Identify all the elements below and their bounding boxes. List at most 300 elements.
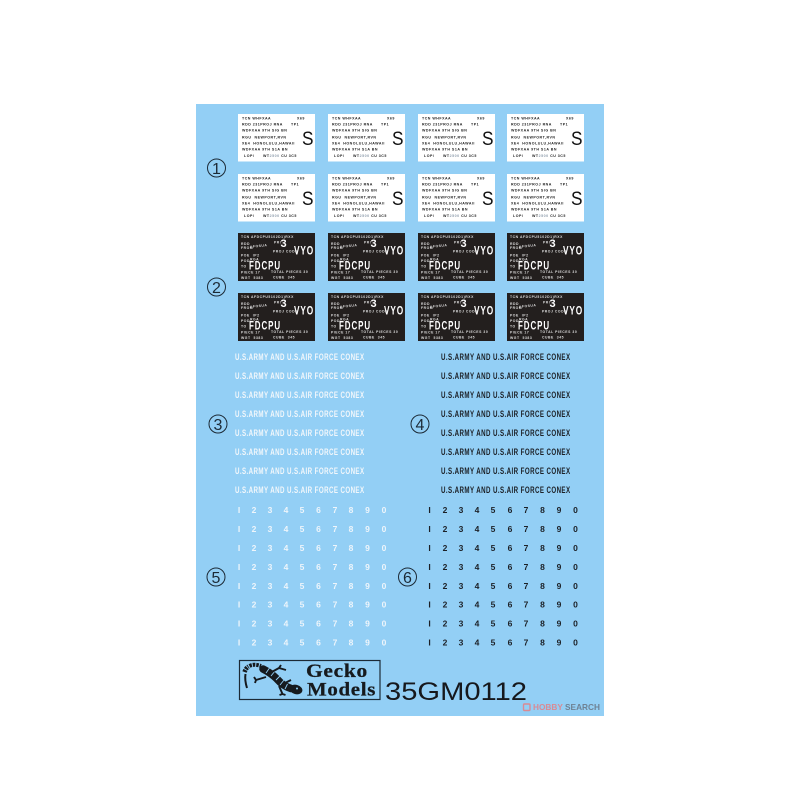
black plate row 1 column 1: TOTAL PIECES 30 — [271, 270, 308, 274]
section 5: white number rows: 0 — [382, 505, 387, 515]
black plate row 1 column 4: CUBE 345 — [542, 276, 564, 280]
section 5: white number rows: 0 — [382, 581, 387, 591]
black plate row 2 column 1: PIECE 17 — [241, 330, 260, 334]
section 3: white CONEX stencil lines: U.S.ARMY AND U.S.AIR FORCE CONEX — [235, 447, 364, 457]
white plate row 1 column 3: S — [482, 128, 494, 150]
black plate row 2 column 3: PRI — [454, 300, 461, 304]
section 5: white number rows: 9 — [365, 600, 370, 610]
section 5: white number rows: 9 — [365, 505, 370, 515]
section 6: black number rows: I — [428, 618, 431, 628]
section 5: white number rows: 6 — [316, 562, 321, 572]
black plate row 2 column 3: 3 — [460, 298, 467, 310]
section 6: black number rows: I — [428, 600, 431, 610]
panel: blue decal sheet — [196, 104, 604, 716]
section 5: white number rows: 4 — [284, 505, 289, 515]
black plate row 1 column 4: VYO — [563, 244, 583, 258]
black plate row 2 column 3: FDCPU — [429, 318, 461, 332]
white plate row 2 column 2: S — [392, 188, 404, 210]
black plate row 1 column 3: PROJ CODE — [453, 250, 478, 254]
black plate row 1 column 4: POD — [510, 259, 519, 263]
white plate row 2 column 1: S — [302, 188, 314, 210]
white plate row 2 column 4: WT2500 CU 3C5 — [532, 214, 566, 218]
section 6: black number rows: 3 — [459, 600, 464, 610]
section 6: black number rows: 9 — [557, 638, 562, 648]
black plate row 1 column 4: PROJ CODE — [542, 250, 567, 254]
black plate row 2 column 1: FDCPU — [249, 318, 281, 332]
black plate row 1 column 3: TOTAL PIECES 30 — [451, 270, 488, 274]
section 6: black number rows: 6 — [508, 562, 513, 572]
section 6: black number rows: 8 — [540, 505, 545, 515]
section 6: black number rows: 0 — [573, 618, 578, 628]
section 6: black number rows: 2 — [443, 543, 448, 553]
black plate row 1 column 1: RGA — [250, 258, 259, 262]
section 6: black number rows: 9 — [557, 618, 562, 628]
section 6: black number rows: 4 — [475, 524, 480, 534]
white plate row 2 column 2: TCN WHFXAA — [332, 176, 361, 180]
white plate row 2 column 1: WDFXAA 9TH S1A BN — [242, 208, 288, 212]
black plate row 2 column 3: AFOSUA — [430, 303, 448, 309]
section 5: white number rows: 0 — [382, 524, 387, 534]
black plate row 2 column 4: TCN AFDCPU5102D1)RXX — [510, 295, 563, 299]
white plate row 2 column 2: LOP/ — [334, 214, 344, 218]
white plate row 2 column 3: XE4 HONOLULU,HAWAII — [422, 201, 475, 205]
white plate row 1 column 2: S — [392, 128, 404, 150]
product code: 35GM0112 — [385, 678, 527, 706]
black plate row 2 column 1: AFOSUA — [250, 303, 268, 309]
black plate row 2 column 2: AFOSUA — [340, 303, 358, 309]
section 6: black number rows: 9 — [557, 581, 562, 591]
section 6: black number rows: 8 — [540, 638, 545, 648]
black plate row 1 column 4: 3 — [550, 238, 556, 250]
white plate row 2 column 1: LOP/ — [244, 214, 254, 218]
section 5: white number rows: I — [238, 543, 240, 553]
white plate row 2 column 1: WT2500 CU 3C5 — [263, 214, 297, 218]
black plate row 1 column 1: 3 — [280, 238, 287, 250]
section 6: black number rows: 4 — [475, 638, 480, 648]
section 5: white number rows: 9 — [365, 562, 370, 572]
black plate row 1 column 2: RGA — [340, 258, 349, 262]
section 6: black number rows: 2 — [443, 524, 448, 534]
section 5: white number rows: 8 — [349, 524, 354, 534]
section 5: white number rows: I — [238, 600, 240, 610]
black plate row 2 column 3: RGA — [430, 318, 439, 322]
section 6: black number rows: 4 — [475, 581, 480, 591]
black plate row 1 column 2: POD — [331, 259, 340, 263]
black plate row 2 column 1: TO — [241, 324, 247, 328]
white plate row 1 column 4 — [507, 114, 584, 162]
section 5: white number rows: I — [238, 562, 240, 572]
section 5: white number rows: 5 — [300, 600, 305, 610]
section 6: black number rows: 4 — [475, 600, 480, 610]
section 4: black CONEX stencil lines: U.S.ARMY AND U.S.AIR FORCE CONEX — [441, 390, 570, 400]
white plate row 2 column 3: WDFXAA 9TH S1A BN — [422, 208, 468, 212]
white plate row 1 column 4: TCN WHFXAA — [511, 116, 540, 120]
black plate row 1 column 4: FROM — [510, 246, 522, 250]
white plate row 1 column 2: X69 — [387, 116, 395, 120]
black plate row 1 column 1: TO — [241, 264, 247, 268]
Gecko Models logo — [240, 660, 380, 700]
section 5: white number rows: 2 — [252, 524, 257, 534]
black plate row 2 column 1: TOTAL PIECES 30 — [271, 330, 308, 334]
black plate row 1 column 1: RDD — [241, 242, 250, 246]
black plate row 1 column 2: FROM — [331, 246, 343, 250]
section 5: white number rows: 3 — [268, 524, 273, 534]
section 6: black number rows: 9 — [557, 562, 562, 572]
section 5: white number rows: 7 — [333, 524, 338, 534]
section 5: white number rows: 3 — [268, 543, 273, 553]
black plate row 1 column 1: PRI — [274, 240, 281, 244]
section 1 number marker — [208, 159, 226, 178]
section 4: black CONEX stencil lines: U.S.ARMY AND U.S.AIR FORCE CONEX — [441, 466, 570, 476]
white plate row 2 column 4: TCN WHFXAA — [511, 176, 540, 180]
section 5: white number rows: 9 — [365, 524, 370, 534]
black plate row 1 column 2: CUBE 345 — [363, 276, 385, 280]
section 6 number marker — [398, 568, 416, 587]
white plate row 2 column 4: XE4 HONOLULU,HAWAII — [511, 201, 564, 205]
black plate row 1 column 1: FDCPU — [249, 258, 281, 272]
black plate row 2 column 1: RDD — [241, 302, 250, 306]
black plate row 1 column 3: PIECE 17 — [421, 270, 440, 274]
section 6: black number rows: 6 — [508, 618, 513, 628]
section 6: black number rows: 6 — [508, 638, 513, 648]
black plate row 2 column 1: CUBE 345 — [273, 336, 295, 340]
white plate row 1 column 2: RGU NEWPORT,RVN — [332, 135, 376, 139]
section 6: black number rows: 0 — [573, 524, 578, 534]
black plate row 2 column 4: CUBE 345 — [542, 336, 564, 340]
black plate row 1 column 4 — [507, 233, 584, 281]
section 5: white number rows: 5 — [300, 618, 305, 628]
section 6: black number rows: 7 — [524, 581, 529, 591]
section 5: white number rows: 2 — [252, 618, 257, 628]
section 6: black number rows: 2 — [443, 600, 448, 610]
section 5: white number rows: 4 — [284, 638, 289, 648]
section 6: black number rows: 5 — [491, 562, 496, 572]
section 5: white number rows: 5 — [300, 524, 305, 534]
white plate row 2 column 3: TP1 — [471, 183, 479, 187]
black plate row 1 column 3: POD — [421, 259, 430, 263]
white plate row 2 column 4: WDFXAA 9TH SIG BN — [511, 189, 556, 193]
white plate row 2 column 4: LOP/ — [513, 214, 523, 218]
black plate row 1 column 3: WGT 5383 — [421, 276, 443, 280]
white plate row 1 column 4: WDFXAA 9TH S1A BN — [511, 148, 557, 152]
section 6: black number rows: 4 — [475, 505, 480, 515]
black plate row 2 column 2: CUBE 345 — [363, 336, 385, 340]
white plate row 2 column 3: X69 — [477, 176, 485, 180]
black plate row 1 column 3: RDD — [421, 242, 430, 246]
black plate row 1 column 1: WGT 5383 — [241, 276, 263, 280]
black plate row 2 column 4: PIECE 17 — [510, 330, 529, 334]
white plate row 2 column 4: S — [571, 188, 582, 210]
white plate row 1 column 2: LOP/ — [334, 154, 344, 158]
white plate row 2 column 1: X69 — [297, 176, 305, 180]
section 6: black number rows: 4 — [475, 618, 480, 628]
section 5: white number rows: 9 — [365, 618, 370, 628]
section 4 number marker — [411, 415, 429, 434]
black plate row 1 column 2 — [328, 233, 405, 281]
section 5: white number rows: 4 — [284, 562, 289, 572]
section 5: white number rows: 8 — [349, 562, 354, 572]
white plate row 1 column 2: TCN WHFXAA — [332, 116, 361, 120]
white plate row 1 column 2: WDFXAA 9TH SIG BN — [332, 129, 377, 133]
section 6: black number rows: 0 — [573, 562, 578, 572]
white plate row 2 column 2: RGU NEWPORT,RVN — [332, 195, 376, 199]
section 6: black number rows: 5 — [491, 600, 496, 610]
section 5: white number rows: 6 — [316, 581, 321, 591]
section 5: white number rows: 6 — [316, 600, 321, 610]
section 3 number marker — [209, 415, 227, 434]
black plate row 2 column 4: TO — [510, 324, 516, 328]
white plate row 2 column 2: X69 — [387, 176, 395, 180]
section 4 number marker: 4 — [416, 417, 425, 434]
section 6: black number rows: 2 — [443, 618, 448, 628]
white plate row 1 column 4: RGU NEWPORT,RVN — [511, 135, 555, 139]
section 6: black number rows: 8 — [540, 543, 545, 553]
section 6: black number rows: 9 — [557, 505, 562, 515]
white plate row 1 column 2: RDD 231PROJ RNA — [332, 123, 373, 127]
section 6: black number rows: 7 — [524, 524, 529, 534]
white plate row 1 column 3: RGU NEWPORT,RVN — [422, 135, 466, 139]
section 4: black CONEX stencil lines — [441, 352, 570, 495]
section 5: white number rows: 2 — [252, 638, 257, 648]
white plate row 2 column 3: S — [482, 188, 494, 210]
white plate row 1 column 3: TCN WHFXAA — [422, 116, 451, 120]
section 5: white number rows: 0 — [382, 618, 387, 628]
black plate row 2 column 4: POE IP2 — [510, 314, 529, 318]
black plate row 2 column 3 — [418, 293, 495, 341]
section 6: black number rows: 2 — [443, 638, 448, 648]
black plate row 2 column 4: RDD — [510, 302, 519, 306]
section 3: white CONEX stencil lines: U.S.ARMY AND U.S.AIR FORCE CONEX — [235, 466, 364, 476]
section 5: white number rows: 5 — [300, 505, 305, 515]
white plate row 2 column 1: RDD 231PROJ RNA — [242, 183, 283, 187]
black plate row 1 column 3: AFOSUA — [430, 243, 448, 249]
section 6: black number rows: 9 — [557, 543, 562, 553]
black plate row 2 column 2: TO — [331, 324, 337, 328]
black plate row 2 column 4: VYO — [563, 304, 583, 318]
section 6: black number rows: 7 — [524, 638, 529, 648]
white plate row 2 column 3: WDFXAA 9TH SIG BN — [422, 189, 467, 193]
section 4: black CONEX stencil lines: U.S.ARMY AND U.S.AIR FORCE CONEX — [441, 409, 570, 419]
black plate row 1 column 2: FDCPU — [339, 258, 371, 272]
black plate row 2 column 2: TOTAL PIECES 30 — [361, 330, 398, 334]
section 6: black number rows: 9 — [557, 524, 562, 534]
section 6: black number rows: 5 — [491, 638, 496, 648]
white plate row 1 column 2: WT2500 CU 3C5 — [353, 154, 387, 158]
section 5: white number rows: 7 — [333, 638, 338, 648]
black plate row 2 column 2: PIECE 17 — [331, 330, 350, 334]
black plate row 2 column 2 — [328, 293, 405, 341]
white plate row 2 column 1: TP1 — [291, 183, 299, 187]
section 6: black number rows: 0 — [573, 543, 578, 553]
section 6: black number rows: 6 — [508, 505, 513, 515]
white plate row 2 column 4: TP1 — [560, 183, 568, 187]
section 5: white number rows: 8 — [349, 638, 354, 648]
section 5: white number rows: 5 — [300, 543, 305, 553]
white plate row 1 column 4: X69 — [566, 116, 574, 120]
section 5: white number rows: 4 — [284, 618, 289, 628]
white plate row 1 column 1: X69 — [297, 116, 305, 120]
white plate row 1 column 4: RDD 231PROJ RNA — [511, 123, 552, 127]
black plate row 2 column 3: VYO — [474, 304, 494, 318]
section 1 number marker: 1 — [212, 161, 221, 178]
black plate row 1 column 3: 3 — [460, 238, 467, 250]
section 6: black number rows: 3 — [459, 524, 464, 534]
black plate row 2 column 1: FROM — [241, 306, 253, 310]
black plate row 2 column 2: TCN AFDCPU5102D1)RXX — [331, 295, 384, 299]
black plate row 1 column 2: PROJ CODE — [363, 250, 388, 254]
black plate row 1 column 1: VYO — [294, 244, 314, 258]
logo wordmark: Gecko — [306, 661, 368, 682]
black plate row 1 column 4: PIECE 17 — [510, 270, 529, 274]
black plate row 1 column 2: PIECE 17 — [331, 270, 350, 274]
white plate row 1 column 2 — [328, 114, 405, 162]
black plate row 2 column 4: TOTAL PIECES 30 — [540, 330, 577, 334]
black plate row 1 column 2: AFOSUA — [340, 243, 358, 249]
black plate row 2 column 3: TCN AFDCPU5102D1)RXX — [421, 295, 474, 299]
white plate row 2 column 4: WDFXAA 9TH S1A BN — [511, 208, 557, 212]
section 6: black number rows: 5 — [491, 543, 496, 553]
section 6: black number rows: 3 — [459, 505, 464, 515]
black plate row 1 column 3: VYO — [474, 244, 494, 258]
black plate row 1 column 4: RDD — [510, 242, 519, 246]
logo wordmark: Models — [307, 679, 376, 700]
black plate row 2 column 2: FROM — [331, 306, 343, 310]
black plate row 1 column 4: FDCPU — [518, 258, 550, 272]
white plate row 2 column 2: TP1 — [381, 183, 389, 187]
white plate row 2 column 2: WDFXAA 9TH S1A BN — [332, 208, 378, 212]
section 5: white number rows: 3 — [268, 600, 273, 610]
black plate row 1 column 3: TCN AFDCPU5102D1)RXX — [421, 235, 474, 239]
black plate row 1 column 2: PRI — [364, 240, 371, 244]
black plate row 2 column 2: POD — [331, 319, 340, 323]
section 6 number marker: 6 — [403, 570, 412, 587]
section 3: white CONEX stencil lines: U.S.ARMY AND U.S.AIR FORCE CONEX — [235, 371, 364, 381]
section 5: white number rows: 6 — [316, 638, 321, 648]
section 3 number marker: 3 — [214, 417, 223, 434]
white plate row 1 column 3: WT2500 CU 3C5 — [443, 154, 477, 158]
black plate row 2 column 2: 3 — [370, 298, 377, 310]
section 5: white number rows: 8 — [349, 505, 354, 515]
white plate row 1 column 1 — [238, 114, 315, 162]
section 6: black number rows: 5 — [491, 581, 496, 591]
black plate row 1 column 4: POE IP2 — [510, 254, 529, 258]
section 6: black number rows: 4 — [475, 543, 480, 553]
icon: gecko — [244, 665, 303, 696]
black plate row 1 column 2: VYO — [384, 244, 404, 258]
section 4: black CONEX stencil lines: U.S.ARMY AND U.S.AIR FORCE CONEX — [441, 371, 570, 381]
white plate row 1 column 4: WT2500 CU 3C5 — [532, 154, 566, 158]
section 6: black number rows: 8 — [540, 581, 545, 591]
section 5: white number rows: 4 — [284, 581, 289, 591]
section 5: white number rows: 7 — [333, 618, 338, 628]
white plate row 2 column 2 — [328, 174, 405, 222]
black plate row 2 column 1: 3 — [280, 298, 287, 310]
section 2: black data plates — [238, 233, 584, 341]
section 6: black number rows: 2 — [443, 581, 448, 591]
black plate row 2 column 2: RGA — [340, 318, 349, 322]
white plate row 2 column 2: WDFXAA 9TH SIG BN — [332, 189, 377, 193]
section 6: black number rows: 8 — [540, 562, 545, 572]
black plate row 2 column 4: FDCPU — [518, 318, 550, 332]
black plate row 1 column 1: POD — [241, 259, 250, 263]
section 6: black number rows: 7 — [524, 505, 529, 515]
white plate row 1 column 4: WDFXAA 9TH SIG BN — [511, 129, 556, 133]
section 5: white number rows: 2 — [252, 600, 257, 610]
black plate row 2 column 3: CUBE 345 — [453, 336, 475, 340]
section 4: black CONEX stencil lines: U.S.ARMY AND U.S.AIR FORCE CONEX — [441, 352, 570, 362]
black plate row 1 column 2: TO — [331, 264, 337, 268]
white plate row 1 column 1: TP1 — [291, 123, 299, 127]
section 6: black number rows: 8 — [540, 600, 545, 610]
section 5: white number rows: 6 — [316, 618, 321, 628]
section 5: white number rows: 5 — [300, 638, 305, 648]
white plate row 1 column 4: XE4 HONOLULU,HAWAII — [511, 141, 564, 145]
section 6: black number rows: I — [428, 638, 431, 648]
black plate row 1 column 3 — [418, 233, 495, 281]
section 5: white number rows: 7 — [333, 505, 338, 515]
section 5: white number rows: 0 — [382, 638, 387, 648]
black plate row 2 column 2: VYO — [384, 304, 404, 318]
black plate row 1 column 4: PRI — [543, 240, 550, 244]
black plate row 1 column 1: PIECE 17 — [241, 270, 260, 274]
section 5: white number rows: 8 — [349, 543, 354, 553]
black plate row 1 column 1: CUBE 345 — [273, 276, 295, 280]
white plate row 1 column 1: RDD 231PROJ RNA — [242, 123, 283, 127]
section 3: white CONEX stencil lines: U.S.ARMY AND U.S.AIR FORCE CONEX — [235, 485, 364, 495]
section 6: black number rows: 7 — [524, 618, 529, 628]
section 5: white number rows: 4 — [284, 543, 289, 553]
white plate row 1 column 3: LOP/ — [424, 154, 434, 158]
section 4: black CONEX stencil lines: U.S.ARMY AND U.S.AIR FORCE CONEX — [441, 428, 570, 438]
black plate row 2 column 4: FROM — [510, 306, 522, 310]
white plate row 2 column 3 — [418, 174, 495, 222]
black plate row 1 column 1: TCN AFDCPU5102D1)RXX — [241, 235, 294, 239]
section 6: black number rows: 5 — [491, 618, 496, 628]
white plate row 2 column 2: RDD 231PROJ RNA — [332, 183, 373, 187]
section 5: white number rows: I — [238, 524, 240, 534]
section 5: white number rows: I — [238, 581, 240, 591]
section 6: black number rows: I — [428, 524, 431, 534]
section 5: white number rows: 0 — [382, 543, 387, 553]
section 3: white CONEX stencil lines: U.S.ARMY AND U.S.AIR FORCE CONEX — [235, 409, 364, 419]
black plate row 1 column 3: FDCPU — [429, 258, 461, 272]
section 5: white number rows: 9 — [365, 581, 370, 591]
white plate row 1 column 2: TP1 — [381, 123, 389, 127]
white plate row 1 column 1: WDFXAA 9TH SIG BN — [242, 129, 287, 133]
black plate row 2 column 1: PRI — [274, 300, 281, 304]
black plate row 2 column 3: PROJ CODE — [453, 310, 478, 314]
black plate row 1 column 3: RGA — [430, 258, 439, 262]
white plate row 2 column 1 — [238, 174, 315, 222]
black plate row 2 column 4: POD — [510, 319, 519, 323]
black plate row 2 column 1 — [238, 293, 315, 341]
black plate row 2 column 4 — [507, 293, 584, 341]
black plate row 2 column 2: PRI — [364, 300, 371, 304]
section 5: white number rows: 4 — [284, 524, 289, 534]
section 6: black number rows: 7 — [524, 600, 529, 610]
white plate row 1 column 3: RDD 231PROJ RNA — [422, 123, 463, 127]
black plate row 2 column 2: FDCPU — [339, 318, 371, 332]
white plate row 1 column 3: TP1 — [471, 123, 479, 127]
white plate row 1 column 2: XE4 HONOLULU,HAWAII — [332, 141, 385, 145]
section 5: white number rows: 4 — [284, 600, 289, 610]
white plate row 2 column 3: LOP/ — [424, 214, 434, 218]
black plate row 2 column 1: VYO — [294, 304, 314, 318]
black plate row 1 column 4: TCN AFDCPU5102D1)RXX — [510, 235, 563, 239]
section 5: white number rows: 7 — [333, 600, 338, 610]
white plate row 2 column 3: RGU NEWPORT,RVN — [422, 195, 466, 199]
section 6: black number rows: I — [428, 562, 431, 572]
